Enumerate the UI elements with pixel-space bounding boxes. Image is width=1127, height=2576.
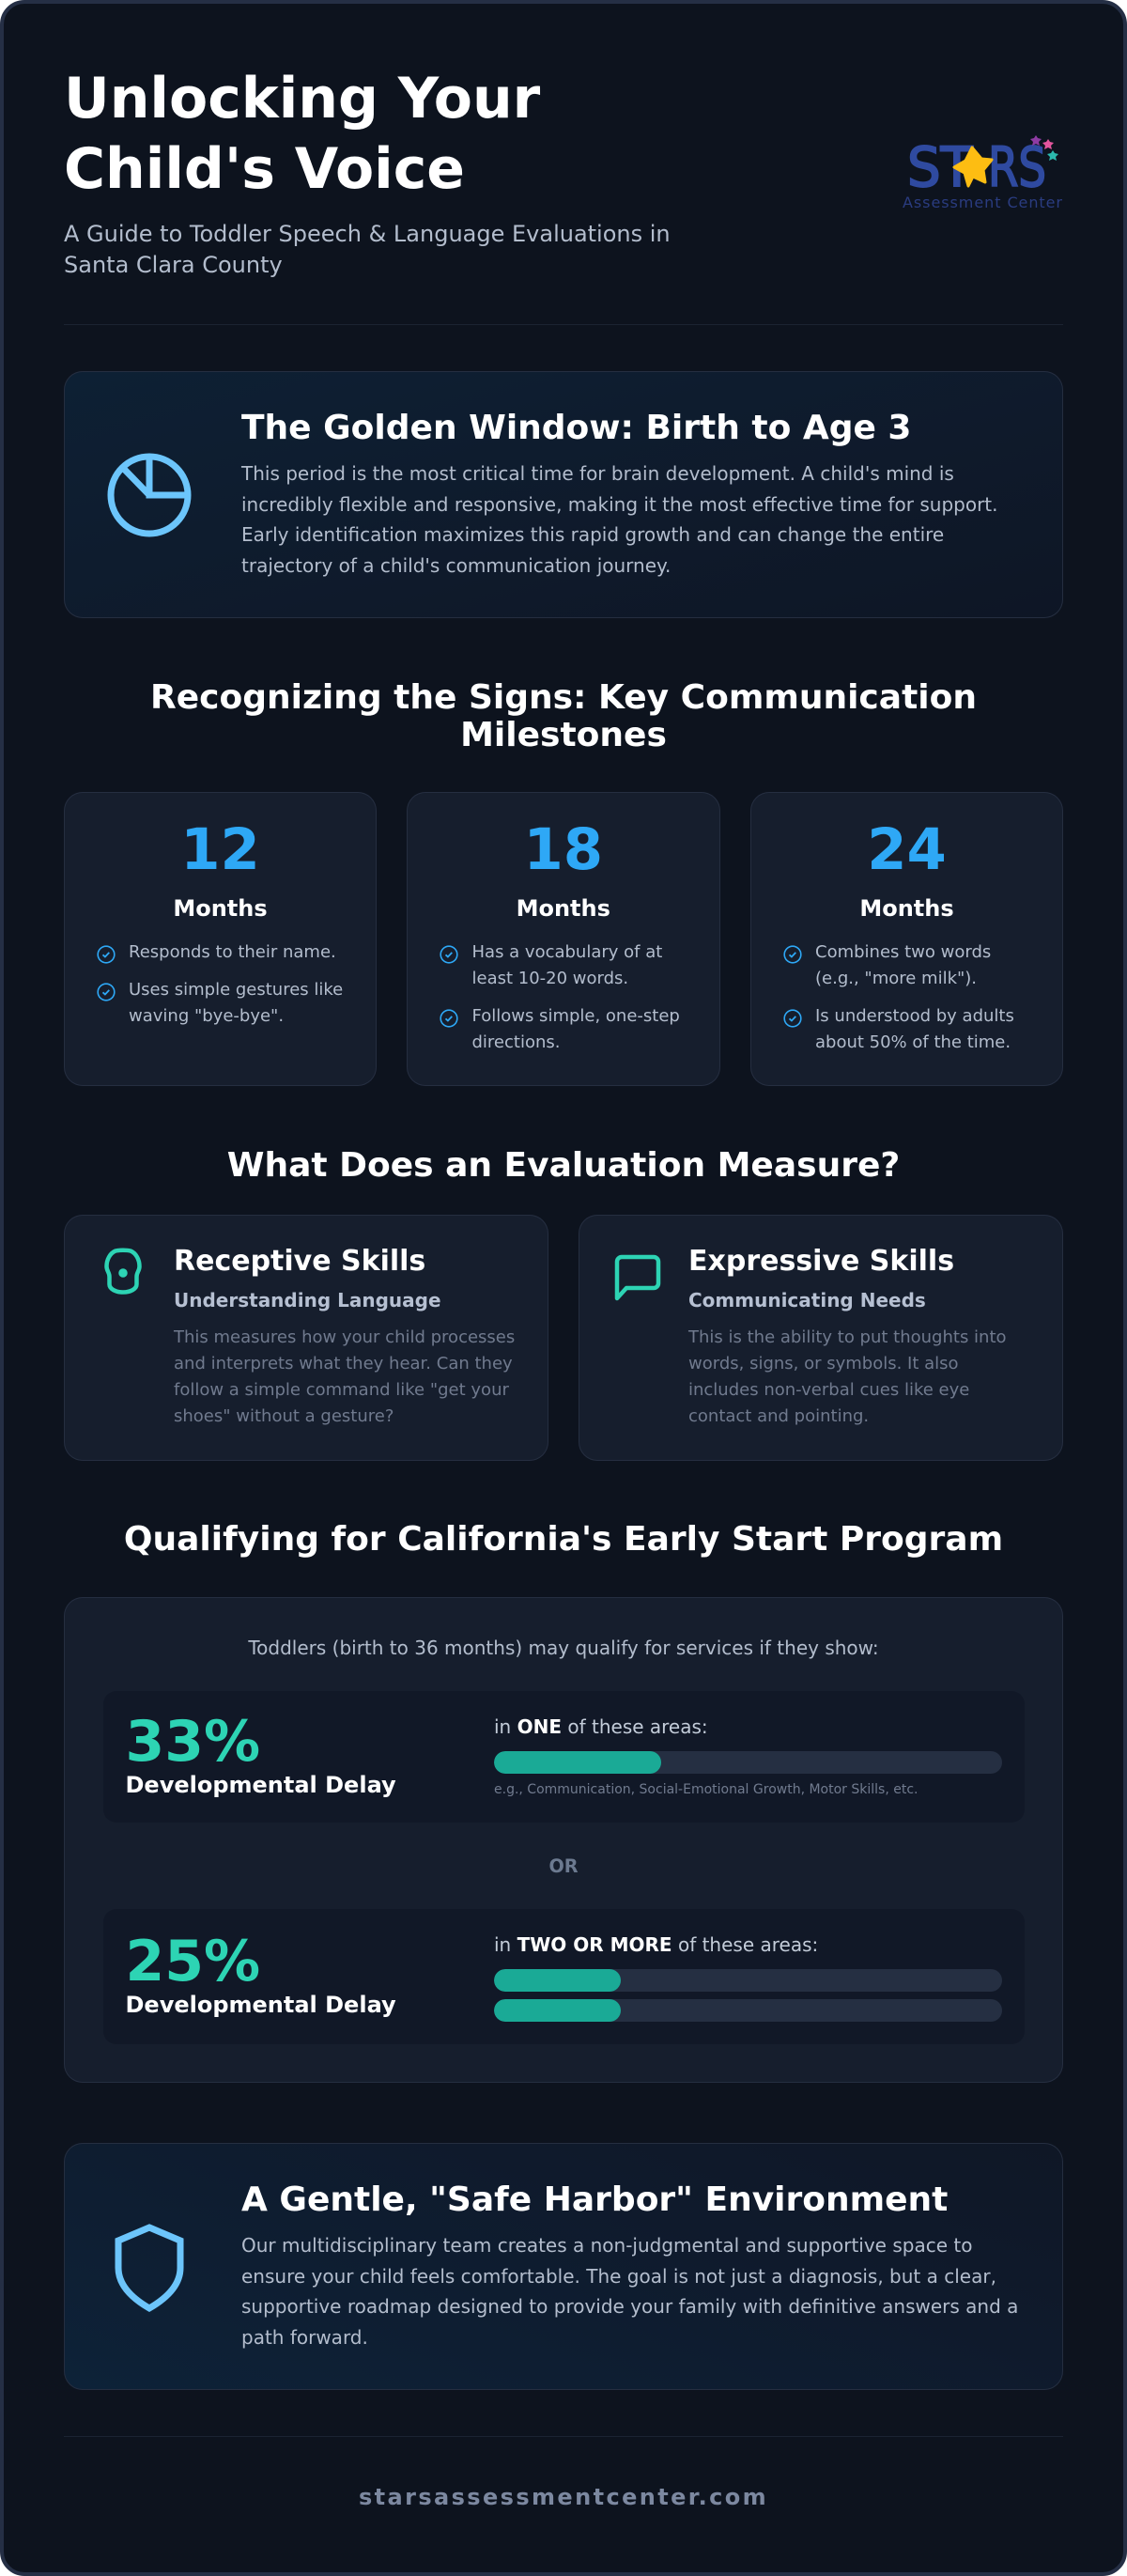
panel: 18 months: [407, 792, 719, 1086]
heading: Receptive Skills: [174, 1245, 425, 1278]
list item: directions.: [471, 1032, 560, 1052]
label: Months: [173, 895, 268, 922]
body text: [240, 462, 998, 577]
panel: expressive skills: [579, 1215, 1063, 1461]
body text: ensure your child feels comfortable. The goal is not just a diagnosis, but a clear,: [241, 2265, 996, 2288]
list item: [471, 942, 662, 988]
body text: Our multidisciplinary team creates a non-judgmental and supportive space to: [241, 2234, 972, 2257]
percentage: 25%: [126, 1929, 260, 1994]
body text: incredibly flexible and responsive, making it the most effective time for support.: [241, 493, 998, 516]
row: 33 percent: [103, 1691, 1025, 1823]
title: Child's Voice: [64, 136, 465, 202]
check icon: [783, 945, 802, 964]
subheading: Communicating Needs: [688, 1289, 926, 1311]
panel: receptive skills: [64, 1215, 548, 1461]
label: Months: [517, 895, 610, 922]
list item: Uses simple gestures like: [129, 980, 343, 1000]
list item: Combines two words: [815, 942, 991, 962]
body text: follow a simple command like "get your: [174, 1379, 509, 1400]
body text: supportive roadmap designed to provide your family with definitive answers and a: [241, 2295, 1018, 2318]
icon: pie chart: [107, 453, 192, 537]
label: Months: [859, 895, 954, 922]
body text: This period is the most critical time for brain development. A child's mind is: [241, 462, 954, 485]
list item: Responds to their name.: [129, 942, 336, 962]
icon: ear: [104, 1248, 142, 1295]
panel: 24 months: [750, 792, 1063, 1086]
heading: The Golden Window: Birth to Age 3: [241, 409, 911, 447]
list item: least 10-20 words.: [471, 969, 628, 988]
body text: words, signs, or symbols. It also: [688, 1353, 959, 1373]
criteria text: in ONE of these areas:: [494, 1715, 708, 1738]
list item: Has a vocabulary of at: [471, 942, 662, 962]
percentage: 33%: [126, 1709, 260, 1775]
body text: includes non-verbal cues like eye: [688, 1379, 969, 1400]
body text: trajectory of a child's communication journey.: [241, 554, 671, 577]
or divider: OR: [548, 1855, 579, 1877]
body text: shoes" without a gesture?: [174, 1405, 394, 1426]
body text: [687, 1327, 1007, 1426]
body text: [173, 1327, 515, 1426]
icon: shield: [115, 2224, 184, 2312]
row: 25 percent: [103, 1909, 1025, 2044]
subtitle: Santa Clara County: [64, 252, 283, 278]
number: 24: [867, 817, 947, 883]
panel: safe harbor: [64, 2143, 1063, 2390]
body text: path forward.: [241, 2326, 368, 2349]
heading: evaluation: What Does an Evaluation Measure?: [227, 1146, 900, 1185]
intro text: Toddlers (birth to 36 months) may qualify for services if they show:: [248, 1637, 879, 1659]
list item: [129, 980, 343, 1026]
title: Unlocking Your: [64, 66, 540, 132]
logo: STARS Assessment Center: [903, 135, 1062, 211]
progress bar: [494, 1969, 1002, 1992]
number: 18: [523, 817, 603, 883]
label: Developmental Delay: [126, 1772, 396, 1798]
number: 12: [180, 817, 260, 883]
panel: early start qualification: [64, 1597, 1063, 2083]
list item: [815, 942, 991, 988]
heading: Expressive Skills: [688, 1245, 954, 1278]
title: [64, 66, 541, 202]
check icon: [440, 945, 458, 964]
list item: [471, 1006, 680, 1052]
footer website: starsassessmentcenter.com: [359, 2484, 768, 2510]
heading: milestones: [150, 678, 977, 754]
heading: milestones: Milestones: [460, 716, 667, 754]
check icon: [97, 983, 116, 1001]
label: Developmental Delay: [126, 1992, 396, 2018]
panel: golden window: [64, 371, 1063, 618]
body text: [241, 2234, 1018, 2349]
subtitle: A Guide to Toddler Speech & Language Evaluations in: [64, 221, 671, 247]
progress bar: [494, 1751, 1002, 1774]
list item: waving "bye-bye".: [129, 1006, 284, 1026]
body text: contact and pointing.: [688, 1405, 869, 1426]
examples note: e.g., Communication, Social-Emotional Growth, Motor Skills, etc.: [494, 1782, 918, 1797]
heading: A Gentle, "Safe Harbor" Environment: [241, 2180, 948, 2219]
panel: 12 months: [64, 792, 377, 1086]
list item: Is understood by adults: [815, 1006, 1014, 1026]
logo: STARS Assessment Center: RS: [988, 135, 1046, 199]
list item: about 50% of the time.: [815, 1032, 1011, 1052]
subtitle: [64, 221, 671, 278]
check icon: [783, 1009, 802, 1028]
logo: STARS Assessment Center: ST: [907, 135, 974, 199]
heading: milestones: Recognizing the Signs: Key Communication: [150, 678, 977, 717]
icon: speech bubble: [614, 1255, 661, 1300]
body text: and interprets what they hear. Can they: [174, 1353, 513, 1373]
heading: early start: Qualifying for California's Early Start Program: [124, 1520, 1003, 1559]
logo: STARS Assessment Center: Assessment Center: [903, 194, 1062, 211]
list item: (e.g., "more milk").: [815, 969, 977, 988]
body text: This measures how your child processes: [174, 1327, 515, 1347]
subheading: Understanding Language: [174, 1289, 441, 1311]
criteria text: in TWO OR MORE of these areas:: [494, 1933, 818, 1956]
check icon: [97, 945, 116, 964]
body text: Early identification maximizes this rapid growth and can change the entire: [241, 523, 944, 546]
body text: This is the ability to put thoughts into: [688, 1327, 1007, 1347]
check icon: [440, 1009, 458, 1028]
list item: [815, 1006, 1014, 1052]
progress bar: [494, 1999, 1002, 2022]
list item: Follows simple, one-step: [471, 1006, 680, 1026]
